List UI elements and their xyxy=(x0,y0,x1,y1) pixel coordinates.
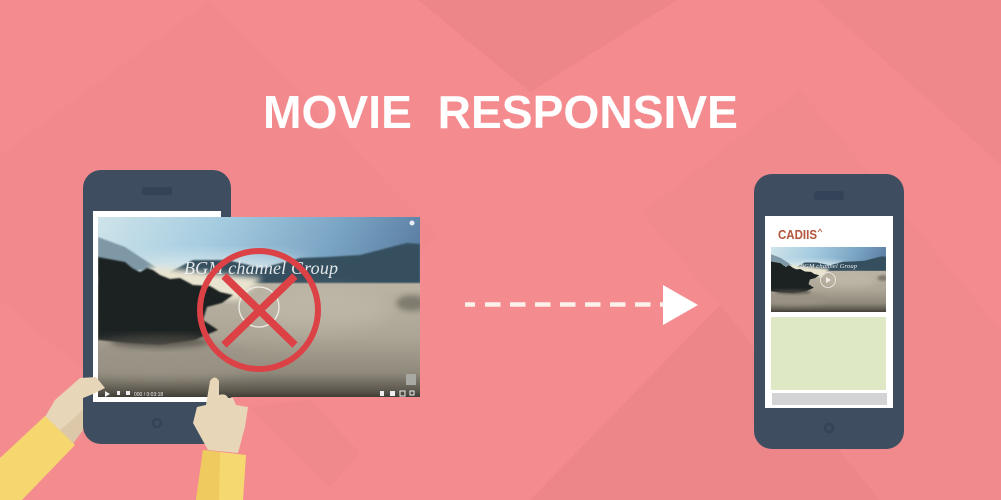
left phone speaker xyxy=(142,187,172,195)
small video caption: BGM channel Group xyxy=(800,263,858,270)
right phone home button xyxy=(825,424,833,432)
right phone screen xyxy=(765,216,893,408)
small video xyxy=(771,247,886,312)
QR code xyxy=(406,374,416,385)
badge xyxy=(410,220,414,226)
right hand xyxy=(193,378,248,500)
left phone screen xyxy=(93,211,221,402)
video caption: BGM channel Group xyxy=(184,258,338,278)
red prohibition mark xyxy=(200,251,318,369)
left sleeve xyxy=(0,416,75,500)
gray footer bar xyxy=(772,393,887,405)
arrow head xyxy=(663,285,698,325)
green content block xyxy=(771,317,886,390)
play ring xyxy=(239,287,279,327)
CADIIS logo: CADIIS xyxy=(778,228,817,242)
small play button xyxy=(820,272,836,288)
left phone xyxy=(83,170,231,444)
dashed arrow xyxy=(465,285,698,325)
controls: 000 / 0:03:18 xyxy=(134,392,163,398)
left hand xyxy=(0,377,105,500)
controls xyxy=(105,391,414,398)
right phone speaker xyxy=(814,191,844,200)
logo mark xyxy=(818,229,822,232)
left phone home button xyxy=(153,419,161,427)
title: MOVIE RESPONSIVE xyxy=(263,86,738,138)
right sleeve xyxy=(196,450,246,500)
oversized video xyxy=(98,217,420,397)
left hand shadow xyxy=(58,410,83,445)
right phone xyxy=(754,174,904,449)
